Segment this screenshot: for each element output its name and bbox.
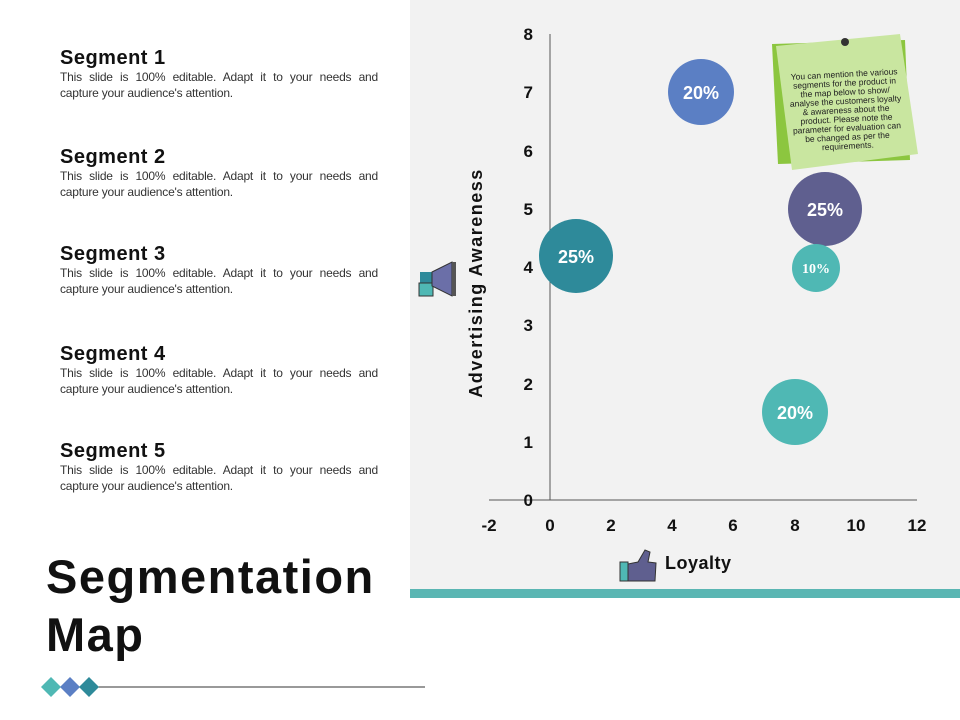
- chart: 1: [524, 433, 533, 452]
- icon: megaphone: [419, 262, 456, 296]
- title: [46, 550, 375, 661]
- segment 1: [60, 47, 378, 100]
- sticky note: & awareness about the: [802, 103, 890, 117]
- sticky note: requirements.: [822, 140, 874, 152]
- segment 2: This slide is 100% editable. Adapt it to your needs and capture your audience's attention.: [60, 169, 378, 199]
- bubbles: 20%: [683, 83, 719, 103]
- bubbles: 25%: [558, 247, 594, 267]
- chart: 10: [847, 516, 865, 535]
- sticky note: [772, 34, 918, 170]
- teal bar: [410, 589, 960, 598]
- chart: 12: [908, 516, 926, 535]
- chart: 8: [524, 25, 533, 44]
- x axis label: Loyalty: [665, 553, 732, 573]
- segment 1: Segment 1: [60, 47, 166, 69]
- chart: 2: [606, 516, 616, 535]
- sticky note: be changed as per the: [805, 130, 890, 144]
- segment 5: Segment 5: [60, 440, 166, 462]
- chart: -2: [481, 516, 497, 535]
- sticky note: segments for the product in: [793, 75, 897, 91]
- segment 5: This slide is 100% editable. Adapt it to your needs and capture your audience's attention.: [60, 463, 378, 493]
- panel: chart background: [410, 0, 960, 590]
- sticky note: analyse the customers loyalty: [790, 93, 902, 109]
- chart: 7: [524, 83, 533, 102]
- bubbles: 20%: [777, 403, 813, 423]
- segment 5: [60, 440, 378, 493]
- bubbles: 10%: [802, 262, 830, 277]
- chart: 6: [728, 516, 738, 535]
- bubbles: 25%: [807, 200, 843, 220]
- chart: 4: [667, 516, 677, 535]
- segment 3: [60, 243, 378, 296]
- segment 1: This slide is 100% editable. Adapt it to your needs and capture your audience's attention.: [60, 70, 378, 100]
- segment 3: Segment 3: [60, 243, 166, 265]
- segment 4: Segment 4: [60, 343, 166, 365]
- sticky note: You can mention the various: [790, 66, 898, 82]
- segment 2: Segment 2: [60, 146, 166, 168]
- icon: thumbs up: [620, 550, 656, 581]
- chart: 8: [790, 516, 800, 535]
- chart: 6: [524, 142, 533, 161]
- chart: 3: [524, 316, 533, 335]
- title: Segmentation: [46, 550, 375, 603]
- segment 4: [60, 343, 378, 396]
- bubbles: [539, 59, 862, 445]
- sticky note: product. Please note the: [800, 112, 893, 126]
- chart: 2: [524, 375, 533, 394]
- decoration: diamonds and line: [41, 677, 425, 697]
- segment 2: [60, 146, 378, 199]
- segment 3: This slide is 100% editable. Adapt it to your needs and capture your audience's attention.: [60, 266, 378, 296]
- chart: 0: [545, 516, 555, 535]
- sticky note: the map below to show/: [800, 85, 891, 99]
- chart: 5: [524, 200, 533, 219]
- y axis label: Advertising Awareness: [466, 168, 486, 398]
- title: Map: [46, 608, 144, 661]
- chart: 0: [524, 491, 533, 510]
- segment 4: This slide is 100% editable. Adapt it to your needs and capture your audience's attention.: [60, 366, 378, 396]
- sticky note: parameter for evaluation can: [793, 120, 902, 136]
- chart: 4: [524, 258, 534, 277]
